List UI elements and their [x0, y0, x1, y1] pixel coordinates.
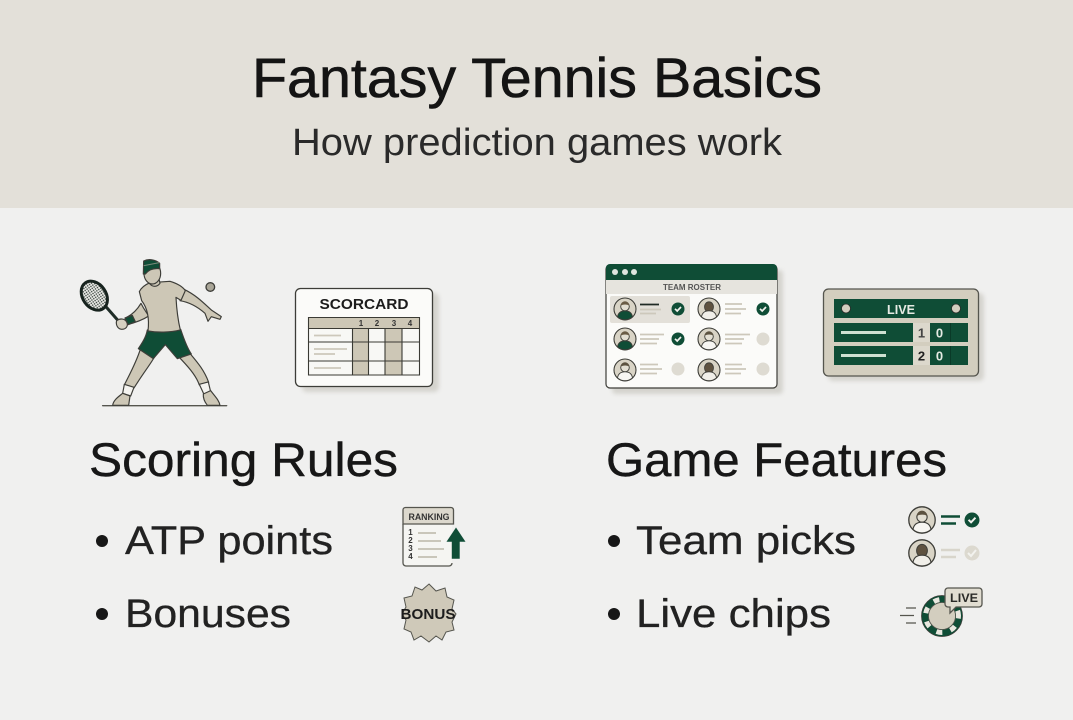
scorecard table: 1: [359, 319, 364, 328]
score row 1: [834, 323, 968, 342]
icon: live chip: LIVE: [950, 591, 978, 605]
icon: tennis player: [76, 260, 227, 406]
score row 1: 0: [936, 326, 943, 340]
icon: ranking: [403, 508, 466, 566]
head: [149, 279, 160, 286]
scorecard table: 2: [375, 319, 380, 328]
scorecard table: [308, 317, 420, 375]
heading: Scoring Rules: Scoring Rules: [89, 433, 398, 486]
legs: [124, 348, 155, 388]
icon: ranking: RANKING: [408, 512, 450, 523]
icon: ranking: 4: [408, 552, 413, 561]
shorts: [138, 329, 191, 359]
list item: ATP points: ATP points: [125, 519, 333, 563]
scorecard table: 3: [392, 319, 397, 328]
roster lines: [640, 304, 659, 306]
icon: ranking: 3: [408, 544, 413, 553]
speech bubble: [945, 588, 982, 613]
ground line: [103, 404, 227, 408]
icon: team roster window: [606, 264, 783, 394]
icon: bonus badge: [400, 584, 456, 642]
icon: scorecard: [296, 288, 439, 392]
list item: Live chips: Live chips: [636, 592, 831, 636]
live label: LIVE: [887, 302, 915, 317]
score row 1: 1: [918, 326, 925, 340]
icon: live scoreboard: [824, 289, 984, 381]
scorecard heading: SCORCARD: [320, 297, 408, 313]
racket: [76, 276, 119, 322]
bonus label: BONUS: [400, 606, 456, 623]
scorecard table: 4: [408, 319, 413, 328]
up arrow: [446, 527, 466, 559]
subtitle: How prediction games work: [292, 122, 783, 164]
roster checks: [672, 302, 684, 316]
icon: team picks: [909, 507, 980, 566]
title: Fantasy Tennis Basics: [252, 46, 822, 109]
roster heading: TEAM ROSTER: [663, 283, 721, 292]
near arm: [125, 303, 149, 325]
list item: Team picks: Team picks: [636, 519, 856, 563]
score row 2: [834, 346, 968, 365]
far arm: [180, 289, 221, 321]
header band: [0, 0, 1073, 208]
ball: [206, 283, 215, 291]
torso: [139, 281, 185, 332]
roster avatars: [614, 298, 720, 381]
heading: Game Features: Game Features: [606, 433, 947, 486]
score row 2: 0: [936, 348, 943, 364]
score row 2: 2: [918, 348, 925, 364]
icon: live chip: [900, 588, 982, 636]
list item: Bonuses: Bonuses: [125, 592, 291, 636]
icon: ranking: 1: [408, 528, 413, 537]
icon: ranking: 2: [408, 536, 413, 545]
